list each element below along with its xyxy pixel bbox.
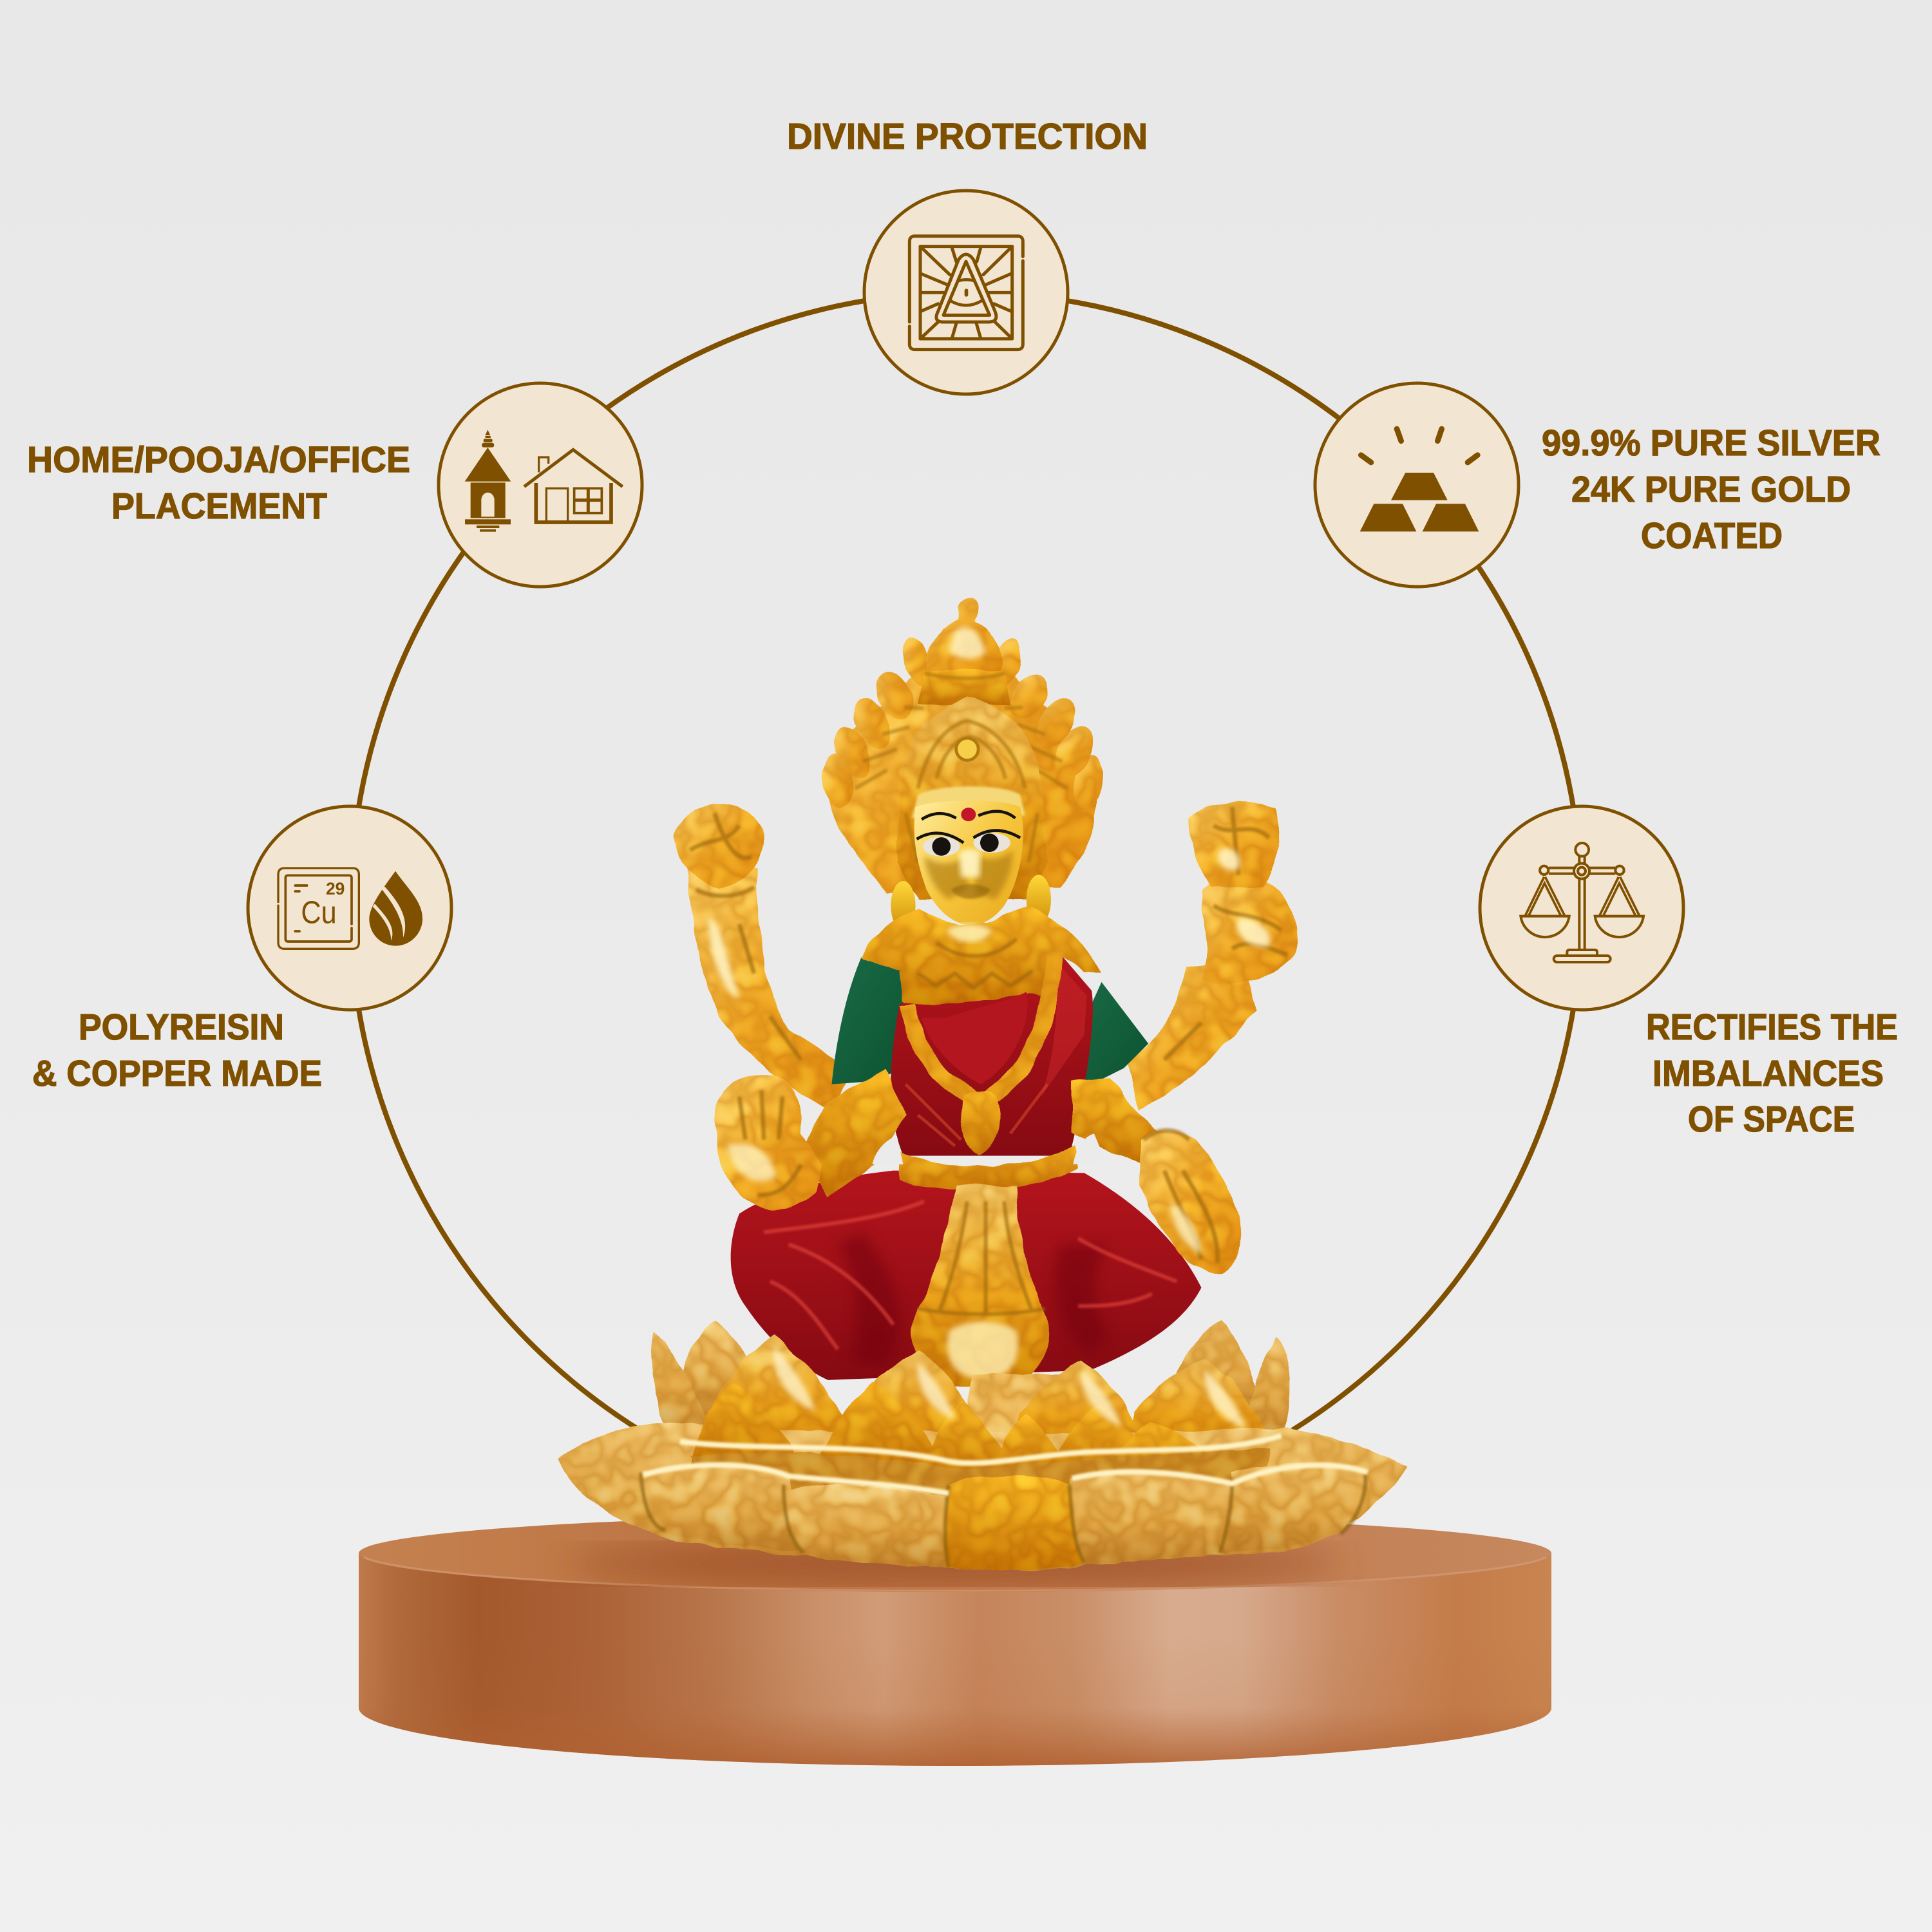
feature: polyresin and copper	[32, 806, 451, 1094]
upper arms holding lotus buds	[673, 801, 1298, 1112]
badge: temple and house icon	[439, 383, 642, 587]
heading: material: & COPPER MADE	[32, 1053, 322, 1094]
heading: placement	[27, 439, 410, 527]
halo and crown	[819, 598, 1106, 892]
dark saucer band	[690, 1448, 1269, 1497]
lower arms and hands	[715, 1070, 1240, 1275]
pedestal side wall	[359, 1553, 1551, 1766]
feature: rectifies imbalances	[1480, 806, 1898, 1140]
badge: copper element and drop icon	[248, 806, 451, 1010]
feature: home pooja office placement	[27, 383, 642, 587]
heading: silver and gold: 99.9% PURE SILVER	[1542, 422, 1880, 464]
heading: divine protection: DIVINE PROTECTION	[787, 116, 1148, 157]
turban	[896, 697, 1047, 900]
saturated inner petals	[690, 1383, 1232, 1484]
red sari upper body	[891, 949, 1093, 1156]
neck, shoulders and necklace	[862, 905, 1101, 1156]
waist belt and centre drape	[896, 1146, 1078, 1386]
heading: material: POLYREISIN	[79, 1007, 284, 1048]
feature: divine protection	[787, 116, 1148, 394]
copper pedestal	[359, 1515, 1551, 1766]
upper ring petals	[700, 1336, 853, 1460]
heading: rectifies: RECTIFIES THE	[1646, 1007, 1898, 1048]
heading: silver and gold: COATED	[1641, 515, 1783, 556]
pedestal top surface	[359, 1515, 1551, 1592]
face	[891, 786, 1051, 931]
lower saucer	[558, 1422, 1407, 1571]
heading: silver and gold: 24K PURE GOLD	[1571, 469, 1851, 510]
heading: silver and gold	[1542, 422, 1880, 556]
back and side petals	[651, 1320, 1290, 1442]
heading: material	[32, 1007, 322, 1094]
green blouse	[831, 958, 1148, 1090]
feature: pure silver and gold coating	[1315, 383, 1880, 587]
badge: gold bars icon	[1315, 383, 1519, 587]
heading: placement: PLACEMENT	[111, 486, 327, 527]
badge: balance scale icon	[1480, 806, 1683, 1010]
badge: yantra icon	[864, 191, 1068, 394]
ring connecting the feature badges	[350, 292, 1582, 1524]
shadow under lotus	[567, 1544, 1340, 1583]
badge: copper element and drop icon: Cu	[301, 895, 337, 930]
centre pale core behind petals	[961, 1374, 1084, 1442]
heading: placement: HOME/POOJA/OFFICE	[27, 439, 410, 480]
red chest panel	[922, 992, 1027, 1084]
lotus base	[558, 1320, 1407, 1571]
eyes, brows and bindi	[916, 808, 1020, 857]
badge: copper element and drop icon: 29	[326, 879, 345, 898]
arm-to-torso gaps	[873, 1133, 1105, 1164]
heading: rectifies: OF SPACE	[1688, 1099, 1855, 1140]
lap and crossed legs	[731, 1171, 1201, 1380]
heading: rectifies	[1646, 1007, 1898, 1140]
front petals	[640, 1464, 801, 1550]
statue of goddess Lakshmi on a lotus	[558, 598, 1407, 1571]
heading: rectifies: IMBALANCES	[1653, 1053, 1884, 1094]
